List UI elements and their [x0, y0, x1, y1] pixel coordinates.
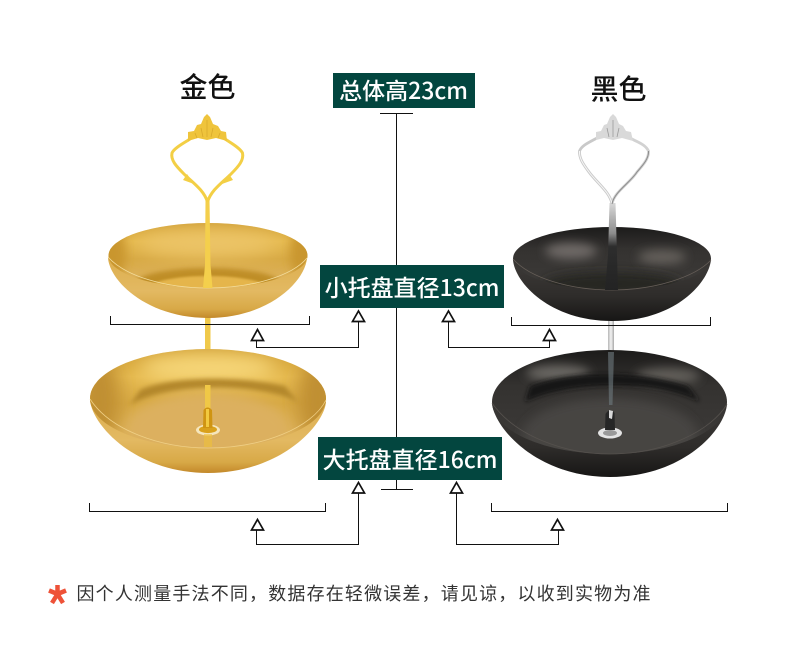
black lower width bracket: [492, 503, 728, 512]
silver handle: [579, 114, 649, 204]
silver fading upper stem: [605, 203, 618, 290]
label: small tray diameter: 小托盘直径13cm: [325, 269, 499, 303]
gold upper stem: [203, 200, 212, 288]
gold handle: [172, 114, 243, 202]
arrow: black upper to small tray label: [442, 311, 556, 348]
gold upper plate: [98, 223, 318, 318]
arrow: gold lower to large tray label: [252, 482, 364, 544]
gold post and base: [196, 408, 220, 447]
black lower plate: [492, 350, 727, 477]
arrow: gold upper to small tray label: [252, 311, 364, 348]
height dimension line: [380, 113, 413, 490]
gold upper width bracket: [110, 316, 310, 324]
label: overall height: 总体高23cm: [339, 72, 468, 106]
gold two-tier tray: [80, 114, 338, 473]
silver post and base: [598, 410, 622, 438]
icon: red asterisk: [49, 585, 66, 603]
footnote: 因个人测量手法不同，数据存在轻微误差，请见谅，以收到实物为准: [76, 580, 650, 606]
gold lower stem: [205, 316, 210, 412]
title: black: 黑色: [590, 68, 647, 108]
title: gold: 金色: [179, 66, 236, 106]
gold lower plate: [80, 349, 338, 473]
black upper plate: [513, 227, 711, 321]
silver lower stem: [608, 319, 614, 352]
black upper width bracket: [512, 317, 710, 326]
arrow: black lower to large tray label: [450, 482, 564, 544]
label: large tray diameter: 大托盘直径16cm: [323, 441, 497, 475]
black two-tier tray: [492, 114, 727, 477]
gold lower width bracket: [90, 503, 326, 512]
